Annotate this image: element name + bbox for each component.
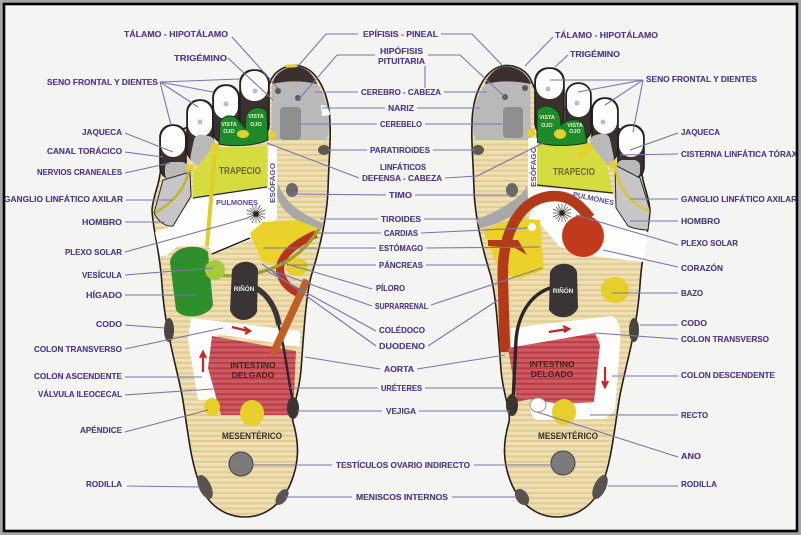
label: rodilla right (608, 479, 717, 489)
trapecio: TRAPECIO (553, 167, 595, 178)
liver (170, 247, 213, 316)
label: hombro: HOMBRO (82, 217, 123, 227)
label: codo: CODO (96, 319, 123, 329)
label: codo (96, 319, 165, 329)
label: hipófisis: PITUITARIA (378, 56, 425, 66)
trapecio (193, 146, 267, 198)
label: bazo (612, 288, 703, 298)
green eye zone: OJO (541, 123, 553, 129)
esophagus (268, 146, 277, 218)
label: corazón: CORAZÓN (681, 262, 723, 273)
pulmones label: PULMONES (572, 190, 615, 207)
label: hígado: HÍGADO (86, 289, 123, 300)
label: plexo solar: PLEXO SOLAR (65, 247, 122, 257)
label: suprarrenal (270, 268, 542, 311)
label: colon descendente: COLON DESCENDENTE (681, 370, 775, 380)
label: epífisis: EPÍFISIS - PINEAL (363, 28, 438, 39)
small intestine: INTESTINO (230, 360, 276, 370)
label: colédoco (265, 270, 425, 335)
label: duodeno (262, 264, 498, 351)
mesentérico: MESENTÉRICO (538, 431, 598, 441)
green eye zone: VISTA (539, 115, 555, 121)
label: meniscos: MENISCOS INTERNOS (356, 492, 448, 502)
green eye zone: VISTA (248, 114, 264, 120)
label: plexo solar right (576, 215, 738, 248)
kidney and ureter (513, 264, 578, 402)
label: uréteres: URÉTERES (381, 382, 422, 393)
label: trigémino right (555, 48, 620, 67)
label: bazo: BAZO (681, 288, 703, 298)
label: codo right (640, 318, 708, 328)
label: corazón (603, 250, 723, 273)
label: vesícula (82, 268, 213, 280)
trapecio (537, 143, 613, 193)
label: hipófisis (298, 45, 505, 100)
label: cardias: CARDIAS (384, 228, 418, 238)
label: epífisis (299, 28, 503, 66)
panel: right foot sole (472, 66, 650, 517)
label: jaqueca right: JAQUECA (681, 127, 720, 137)
kidney and ureter: RIÑÓN (553, 286, 574, 295)
stomach red bands (488, 240, 527, 255)
label: colon transverso right (595, 333, 769, 344)
small intestine: INTESTINO (529, 359, 575, 369)
green eye zone (219, 107, 268, 146)
black line under lungs (212, 238, 250, 254)
esophagus (528, 138, 538, 200)
label: colédoco: COLÉDOCO (379, 324, 425, 335)
label: hígado (86, 289, 195, 300)
esophagus: ESÓFAGO (529, 147, 538, 187)
label: tálamo right (525, 29, 658, 66)
label: plexo solar right: PLEXO SOLAR (681, 238, 738, 248)
big toe zones (271, 64, 330, 140)
label: apéndice (80, 410, 208, 435)
label: nervios craneales: NERVIOS CRANEALES (37, 167, 122, 177)
reflex points (472, 145, 639, 508)
label: nervios craneales (37, 163, 170, 177)
yellow lymph curve (615, 168, 649, 211)
shoulder band (476, 186, 528, 228)
trapecio: TRAPECIO (219, 166, 261, 177)
kidney and ureter: RIÑÓN (234, 284, 255, 293)
label: recto: RECTO (681, 410, 708, 420)
yellow lymph curve (155, 170, 189, 213)
label: seno frontal right (550, 74, 757, 132)
heart (562, 215, 604, 257)
small intestine: DELGADO (531, 369, 574, 379)
label: canal torácico: CANAL TORÁCICO (47, 145, 122, 156)
labels: centre column (252, 28, 552, 502)
small intestine: DELGADO (232, 370, 275, 380)
kidney and ureter (230, 262, 293, 402)
label: testículos: TESTÍCULOS OVARIO INDIRECTO (336, 459, 470, 470)
label: suprarrenal: SUPRARRENAL (375, 301, 428, 311)
label: estómago: ESTÓMAGO (379, 242, 423, 253)
stomach (483, 218, 544, 279)
label: seno frontal: SENO FRONTAL Y DIENTES (47, 77, 158, 87)
big toe zones (473, 67, 531, 140)
yellow reflex dots (527, 129, 617, 169)
label: trigémino (174, 52, 273, 100)
label: válvula ileocecal (38, 388, 213, 399)
label: cerebro: CEREBRO - CABEZA (361, 87, 441, 97)
label: trigémino right: TRIGÉMINO (570, 48, 620, 59)
labels: left column (4, 28, 278, 489)
label: colon transverso: COLON TRANSVERSO (34, 344, 122, 354)
small intestine (208, 336, 296, 415)
label: vesícula: VESÍCULA (82, 269, 122, 280)
label: ganglio: GANGLIO LINFÁTICO AXILAR (4, 193, 123, 204)
white dot (528, 223, 536, 231)
label: jaqueca: JAQUECA (82, 127, 122, 137)
label: apéndice: APÉNDICE (80, 424, 122, 435)
label: aorta: AORTA (384, 364, 414, 374)
panel: left foot sole (152, 64, 330, 517)
label: canal torácico (47, 145, 163, 157)
white colon (511, 316, 620, 420)
label: hipófisis: HIPÓFISIS (380, 45, 423, 56)
yellow reflex dots (186, 131, 276, 172)
pulmones label: PULMONES (216, 198, 258, 207)
label: linfáticos (267, 143, 543, 183)
colon arrows (549, 326, 608, 387)
label: páncreas: PÁNCREAS (379, 259, 423, 270)
label: recto (590, 410, 708, 420)
label: tiroides: TIROIDES (381, 214, 421, 224)
small intestine (508, 333, 600, 404)
label: ano (537, 412, 702, 461)
label: timo: TIMO (389, 190, 413, 200)
reflex points (164, 145, 330, 507)
label: colon ascendente: COLON ASCENDENTE (34, 371, 122, 381)
green eye zone: VISTA (221, 122, 237, 128)
toes (160, 70, 269, 180)
red ring (280, 234, 316, 294)
label: ganglio right: GANGLIO LINFÁTICO AXILAR (681, 193, 797, 204)
label: hombro right: HOMBRO (681, 216, 720, 226)
mesentérico: MESENTÉRICO (222, 431, 282, 441)
labels: right column (525, 29, 797, 489)
white heart zone (528, 187, 648, 262)
label: codo right: CODO (681, 318, 708, 328)
label: píloro (280, 262, 405, 293)
lateral gray zone (154, 172, 191, 226)
esophagus: ESÓFAGO (268, 163, 277, 203)
white lung zone (155, 187, 277, 256)
white colon (188, 318, 300, 400)
label: linfáticos: DEFENSA - CABEZA (362, 173, 442, 183)
sole outline (152, 66, 330, 517)
label: ano: ANO (681, 451, 702, 461)
label: cisterna: CISTERNA LINFÁTICA TÓRAX (681, 148, 797, 159)
label: aorta (305, 355, 505, 374)
label: nariz: NARIZ (388, 103, 414, 113)
colon arrows (200, 327, 250, 372)
label: rodilla right: RODILLA (681, 479, 717, 489)
label: duodeno: DUODENO (379, 341, 426, 351)
lateral gray zone (615, 165, 650, 230)
label: jaqueca (82, 127, 173, 152)
bile duct (207, 153, 215, 246)
shoulder band (277, 183, 324, 231)
label: colon transverso (34, 328, 223, 354)
label: plexo solar (65, 218, 248, 257)
green eye zone (537, 106, 587, 146)
green eye zone: OJO (250, 122, 262, 128)
label: cardias (318, 228, 527, 238)
label: válvula ileocecal: VÁLVULA ILEOCECAL (38, 388, 122, 399)
toes (535, 68, 644, 179)
label: tálamo (124, 28, 278, 88)
label: rodilla: RODILLA (86, 479, 122, 489)
label: píloro: PÍLORO (376, 282, 405, 293)
sole outline (472, 66, 650, 517)
green eye zone: VISTA (567, 123, 583, 129)
label: paratiroides: PARATIROIDES (370, 145, 430, 155)
label: tálamo: TÁLAMO - HIPOTÁLAMO (124, 28, 228, 39)
label: linfáticos: LINFÁTICOS (380, 161, 426, 172)
label: seno frontal right: SENO FRONTAL Y DIENTES (646, 74, 757, 84)
label: hombro (82, 217, 165, 227)
label: hombro right (630, 216, 720, 226)
label: cerebelo: CEREBELO (380, 119, 422, 129)
aorta arch (503, 196, 590, 352)
green eye zone: OJO (569, 129, 581, 135)
solar plexus (553, 204, 571, 222)
stomach (250, 220, 320, 264)
label: rodilla (86, 479, 200, 489)
label: seno frontal (47, 77, 240, 125)
aorta (273, 280, 307, 354)
label: vejiga: VEJIGA (386, 406, 416, 416)
label: colon transverso right: COLON TRANSVERSO (681, 334, 769, 344)
label: trigémino: TRIGÉMINO (174, 52, 228, 63)
label: jaqueca right (630, 127, 720, 150)
solar plexus (247, 205, 265, 223)
gallbladder with duct (205, 229, 319, 280)
green eye zone: OJO (223, 129, 235, 135)
label: tálamo right: TÁLAMO - HIPOTÁLAMO (555, 29, 658, 40)
